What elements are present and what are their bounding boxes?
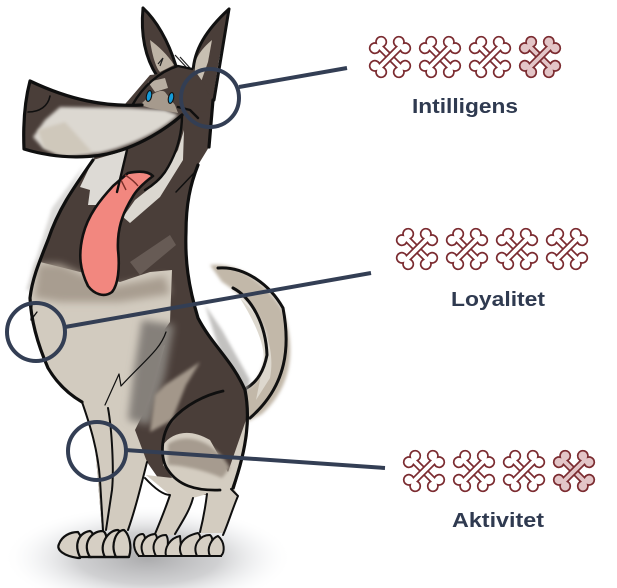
rating: Intilligens [368,35,562,79]
rear paw [134,533,224,556]
ink outlines [24,66,247,535]
body [30,70,247,530]
label: Intilligens: Intilligens [412,96,518,118]
rating: Aktivitet [402,449,596,493]
ground shadow [6,506,290,588]
callout: loyalty [7,273,371,361]
haunch [163,420,248,490]
hind legs [146,475,238,535]
grey back brush strokes [205,305,250,396]
tail [210,265,290,422]
callout: activity [68,422,385,480]
ears [142,8,229,105]
neck white fur [80,130,184,223]
eyes [145,90,175,104]
chest and lower fur [30,235,200,530]
callout: intelligence [181,68,347,127]
tongue [80,172,153,295]
rating: Loyalitet [395,227,589,271]
label: Aktivitet: Aktivitet [452,510,544,532]
dog illustration [23,8,290,558]
head [23,66,212,156]
label: Loyalitet: Loyalitet [451,289,545,311]
front paw [58,530,130,558]
